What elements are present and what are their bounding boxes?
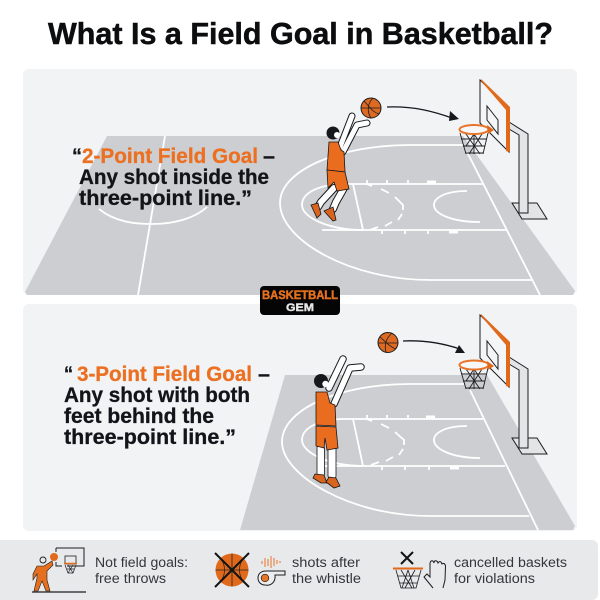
net <box>460 368 488 389</box>
text: free throws <box>95 555 188 586</box>
jersey <box>327 142 345 172</box>
icon: whistle <box>258 556 285 585</box>
text: violations: cancelled baskets <box>454 555 567 570</box>
basketball hoop <box>460 314 547 454</box>
backboard <box>480 315 509 387</box>
rim <box>460 125 488 134</box>
pole and base <box>509 357 547 454</box>
rim <box>460 360 488 370</box>
backboard <box>480 80 509 152</box>
text: 3-point definition: “ <box>64 363 73 386</box>
panel: 3-point field goal <box>23 304 577 531</box>
player jumping <box>311 116 367 221</box>
panel: 2-point field goal <box>23 69 577 295</box>
text: 2-point definition: 2-Point Field Goal <box>82 145 258 168</box>
text: violations <box>454 555 567 586</box>
text: free throws: free throws <box>95 571 166 586</box>
text: free throws: Not field goals: <box>95 555 188 570</box>
text: whistle <box>292 555 361 586</box>
arrow: shot path <box>403 341 465 353</box>
basketball hoop <box>460 79 547 219</box>
panel: exceptions strip <box>0 540 598 600</box>
text: 2-point definition: three-point line.” <box>79 187 252 210</box>
logo <box>260 286 340 315</box>
text: 3-point definition: – <box>258 363 270 386</box>
icon: crossed-out ball <box>215 553 249 587</box>
logo: BASKETBALL <box>262 288 338 302</box>
text: 3-point definition: 3-Point Field Goal <box>77 363 252 386</box>
arms <box>329 359 361 404</box>
shorts <box>316 426 338 450</box>
shorts <box>327 170 349 191</box>
jersey <box>316 392 336 426</box>
player standing <box>313 359 361 488</box>
head <box>314 374 328 388</box>
logo: GEM <box>286 302 314 314</box>
icon: free throw <box>32 548 86 592</box>
legs <box>318 188 344 209</box>
strip background <box>0 540 598 600</box>
panel background <box>23 69 577 295</box>
icon: cancelled basket <box>393 552 423 588</box>
court lines <box>99 136 540 295</box>
text: 2-point definition: Any shot inside the <box>79 166 269 189</box>
icon: hand <box>424 561 446 588</box>
text: 3-point definition: three-point line.” <box>64 426 236 449</box>
shoes <box>313 474 327 483</box>
arms <box>340 116 367 152</box>
court floor <box>240 375 575 530</box>
text: 3-point definition: feet behind the <box>64 405 214 428</box>
text: whistle: the whistle <box>292 571 361 586</box>
panel background <box>23 304 577 531</box>
shoes <box>311 203 321 218</box>
text: 2-point definition: “ <box>72 145 82 168</box>
pole and base <box>509 122 547 219</box>
text: 3-point definition <box>64 363 270 449</box>
arrow: shot path <box>387 107 459 121</box>
court lines <box>282 384 538 530</box>
icon: ball <box>378 332 398 352</box>
court floor <box>25 136 575 295</box>
text: 3-point definition: Any shot with both <box>64 384 250 407</box>
text: violations: for violations <box>454 571 535 586</box>
text: 2-point definition <box>72 145 275 210</box>
head <box>326 126 340 140</box>
legs <box>317 446 324 476</box>
net <box>460 133 488 154</box>
text: 2-point definition: – <box>263 145 275 168</box>
text: whistle: shots after <box>292 555 361 570</box>
icon: ball <box>361 98 381 118</box>
title: What Is a Field Goal in Basketball? <box>48 16 553 51</box>
